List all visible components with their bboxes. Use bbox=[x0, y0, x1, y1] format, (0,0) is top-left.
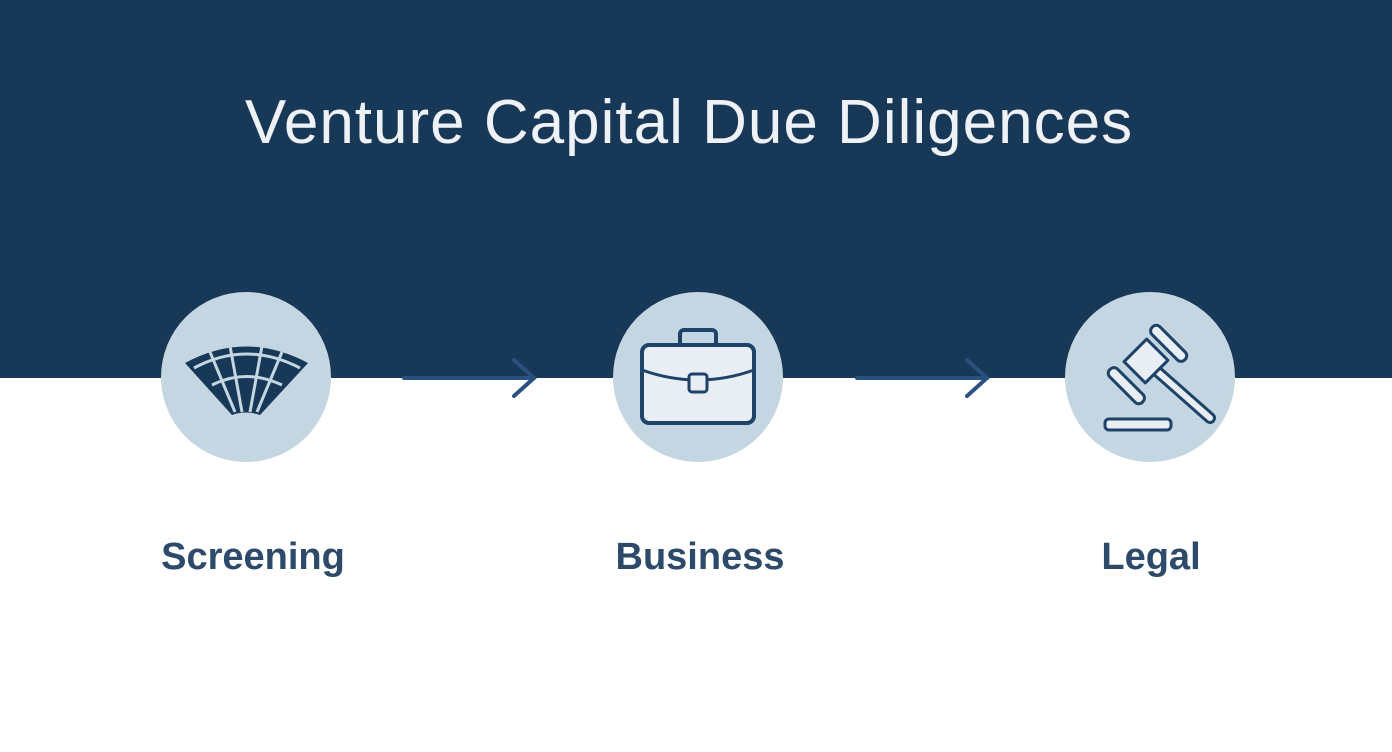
label: Screening: Screening bbox=[161, 536, 345, 578]
step: screening icon bbox=[161, 292, 331, 462]
arrow 2 bbox=[857, 360, 987, 396]
title: Venture Capital Due Diligences bbox=[245, 88, 1133, 157]
step: business icon bbox=[613, 292, 783, 462]
label: Legal: Legal bbox=[1101, 536, 1201, 578]
header band bbox=[0, 0, 1392, 378]
label: Business: Business bbox=[616, 536, 784, 578]
step: legal icon bbox=[1065, 292, 1235, 462]
arrow 1 bbox=[404, 360, 534, 396]
